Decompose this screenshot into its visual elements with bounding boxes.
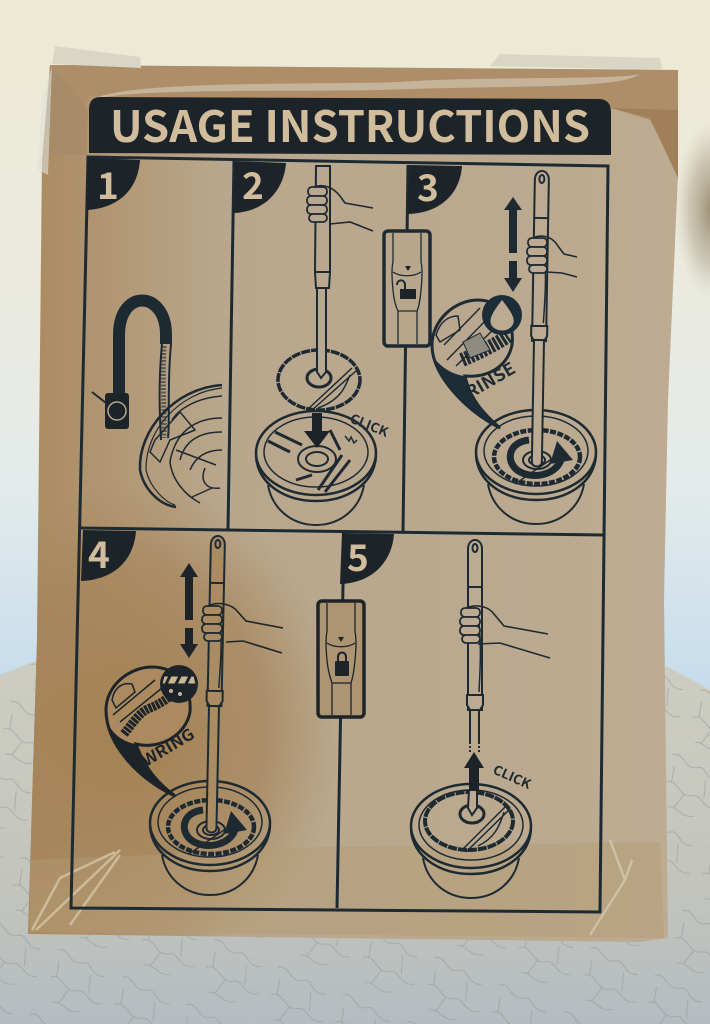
panel 1 (87, 156, 222, 507)
step badge 5: 5 (347, 528, 369, 582)
step badge 3 (408, 158, 462, 214)
callout: rinse (432, 295, 522, 428)
packing tape (52, 46, 662, 70)
step badge 4: 4 (88, 525, 110, 579)
step badge 1: 1 (97, 156, 119, 210)
label: click: CLICK (490, 759, 535, 793)
lock panel closed (318, 601, 364, 717)
icon: up down arrows (504, 197, 522, 292)
panel 2 (233, 156, 392, 525)
title banner (89, 93, 611, 155)
step badge 2 (233, 156, 286, 213)
panel 3 (408, 158, 596, 524)
step badge 1 (87, 156, 140, 210)
label: click: CLICK (348, 408, 392, 441)
lock panel open (384, 231, 430, 346)
icon: mop handle and hand (527, 171, 577, 467)
wall shadow (674, 120, 710, 300)
label: wring: WRING (136, 721, 198, 771)
icon: bucket with mop head (411, 784, 531, 898)
icon: bucket spinning (476, 410, 596, 524)
icon: mop handle and hand (202, 536, 283, 833)
warm shading (29, 514, 322, 936)
step badge 2: 2 (242, 156, 264, 210)
icon: mop head (278, 350, 360, 411)
icon: water drop (482, 295, 522, 335)
icon: up down arrows (180, 563, 198, 658)
label: rinse: RINSE (460, 355, 519, 403)
icon: wringer droplets (160, 665, 198, 703)
callout: wring (106, 665, 198, 796)
background table (0, 660, 710, 1024)
panel 4 (81, 525, 283, 895)
background wall (0, 0, 710, 690)
icon: mop handle and hand (307, 166, 373, 378)
panel frame (71, 157, 608, 912)
icon: mop handle and hand (460, 540, 550, 815)
icon: bucket with click (256, 408, 392, 525)
step badge 3: 3 (417, 158, 439, 212)
icon: up arrow (464, 752, 484, 791)
step badge 4 (81, 525, 136, 581)
icon: bucket spinning (150, 781, 270, 895)
title: USAGE INSTRUCTIONS (110, 93, 590, 155)
panel 5 (340, 528, 550, 898)
step badge 5 (340, 528, 394, 584)
icon: faucet and bucket (92, 300, 222, 507)
